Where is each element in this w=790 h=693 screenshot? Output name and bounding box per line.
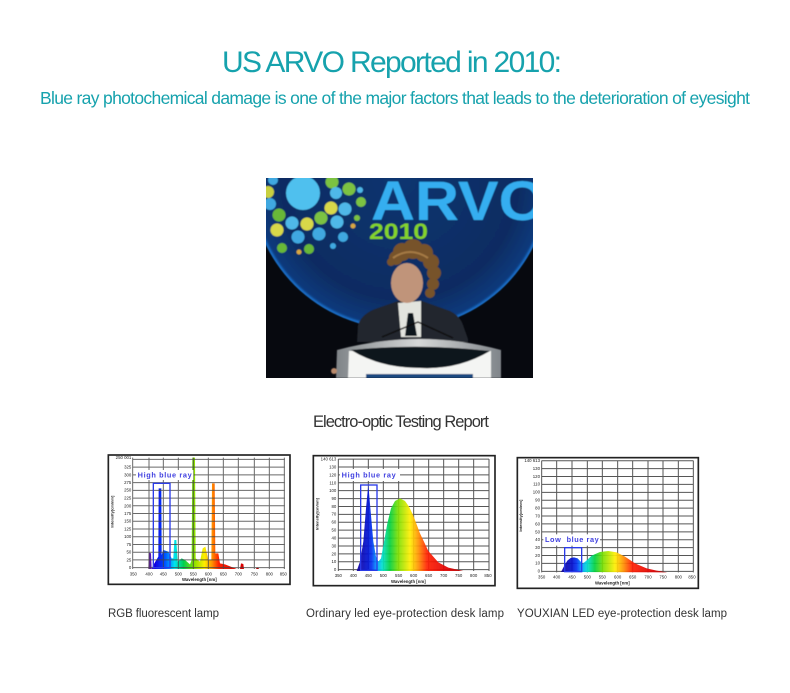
y axis labels: 120 — [329, 472, 337, 477]
podium — [331, 339, 501, 378]
y axis labels: 0 — [538, 569, 541, 574]
y axis labels: 40 — [535, 537, 541, 542]
chart: RGB fluorescent lamp spectrum — [108, 455, 290, 584]
callout: high blue ray — [340, 469, 400, 481]
x axis labels: 750 — [659, 575, 667, 580]
x axis labels — [130, 572, 288, 582]
y axis labels: 0 — [334, 567, 337, 572]
y axis labels: 225 — [124, 495, 132, 500]
y axis labels: 140 613 — [321, 456, 337, 461]
x axis labels: 450 — [365, 573, 373, 578]
x axis labels: Wavelength [nm] — [391, 579, 426, 584]
section heading: Electro-optic Testing Report — [313, 413, 489, 431]
y axis labels — [116, 455, 132, 570]
caption: RGB fluorescent lamp: RGB fluorescent lamp — [108, 608, 219, 620]
y axis labels: 100 — [329, 488, 337, 493]
y axis labels: 70 — [332, 512, 337, 517]
y axis labels: 130 — [329, 464, 337, 469]
x axis labels: 400 — [145, 572, 153, 577]
x axis labels — [335, 573, 492, 584]
x axis labels: 800 — [266, 572, 274, 577]
x axis labels: 500 — [380, 573, 388, 578]
spectrum area — [357, 484, 463, 571]
y axis title: Intensity[cm/nm] — [110, 495, 115, 528]
x axis labels: 350 — [538, 575, 546, 580]
x axis labels: 600 — [410, 573, 418, 578]
y axis labels: 110 — [533, 482, 541, 487]
y axis labels: 0 — [129, 565, 132, 570]
y axis labels: 140 613 — [524, 458, 541, 463]
x axis labels: 550 — [395, 573, 403, 578]
caption: ordinary LED lamp: Ordinary led eye-protection desk lamp — [306, 608, 504, 620]
speaker — [357, 239, 468, 342]
chart frame — [108, 455, 290, 584]
chart: YOUXIAN LED spectrum — [517, 458, 698, 588]
callout: high blue ray: High blue ray — [138, 471, 193, 480]
y axis labels: 20 — [332, 551, 337, 556]
y axis labels: 20 — [535, 553, 541, 558]
chart frame — [313, 456, 495, 586]
y axis labels: 110 — [329, 480, 337, 485]
projected blue disk — [266, 178, 533, 324]
x axis labels: 700 — [644, 575, 652, 580]
ARVO wordmark: ARVO — [371, 169, 546, 232]
y axis labels: 60 — [332, 520, 337, 525]
x axis labels: 550 — [599, 575, 607, 580]
y axis labels: 275 — [124, 480, 132, 485]
y axis labels: 90 — [535, 498, 541, 503]
y axis labels: 120 — [533, 474, 541, 479]
logo dots — [262, 175, 366, 254]
y axis labels: 150 — [124, 519, 132, 524]
callout: low blue ray: Low blue ray — [545, 535, 600, 544]
x axis labels: 500 — [175, 572, 183, 577]
x axis labels: 700 — [235, 572, 243, 577]
x axis labels: 350 — [130, 572, 138, 577]
y axis labels: 40 — [332, 535, 337, 540]
caption: YOUXIAN LED lamp: YOUXIAN LED eye-protection desk lamp — [517, 608, 727, 620]
x axis labels: 850 — [688, 575, 696, 580]
y axis labels: 25 — [127, 557, 132, 562]
x axis labels: 750 — [251, 572, 259, 577]
y axis labels: 50 — [332, 528, 337, 533]
y axis labels — [524, 458, 541, 574]
title: US ARVO Reported in 2010: — [222, 46, 562, 79]
x axis labels: 850 — [280, 572, 288, 577]
y axis labels: 250 — [124, 488, 132, 493]
x axis labels — [538, 575, 696, 586]
y axis labels: 70 — [535, 513, 541, 518]
chart: ordinary LED spectrum — [313, 456, 495, 586]
y axis labels: 75 — [127, 542, 132, 547]
subtitle: Blue ray photochemical damage is one of the major factors that leads to the deterioration of eyesight — [40, 88, 750, 108]
y axis labels: 325 — [124, 465, 132, 470]
y axis title: Intensity[cm/nm] — [315, 497, 320, 530]
x axis labels: 450 — [160, 572, 168, 577]
y axis title: Intensity[cm/nm] — [518, 499, 523, 532]
callout: high blue ray: High blue ray — [342, 471, 397, 480]
y axis labels: 50 — [535, 529, 541, 534]
x axis labels: 400 — [553, 575, 561, 580]
y axis labels: 200 — [124, 503, 132, 508]
y axis labels: 175 — [124, 511, 132, 516]
x axis labels: 500 — [584, 575, 592, 580]
x axis labels: 650 — [425, 573, 433, 578]
x axis labels: Wavelength [nm] — [182, 577, 217, 582]
x axis labels: Wavelength [nm] — [595, 581, 630, 586]
x axis labels: 750 — [455, 573, 463, 578]
x axis labels: 800 — [470, 573, 478, 578]
blue ray highlight box — [153, 483, 170, 568]
y axis labels: 80 — [535, 505, 541, 510]
y axis labels: 100 — [124, 534, 132, 539]
x axis labels: 800 — [675, 575, 683, 580]
y axis labels: 30 — [535, 545, 541, 550]
x axis labels: 350 — [335, 573, 343, 578]
chart frame — [517, 458, 698, 588]
y axis labels: 100 — [533, 490, 541, 495]
y axis labels: 300 — [124, 472, 132, 477]
x axis labels: 400 — [350, 573, 358, 578]
y axis labels: 250 001 — [116, 455, 132, 460]
2010 wordmark: 2010 — [369, 219, 428, 244]
y axis labels: 90 — [332, 496, 337, 501]
y axis labels: 10 — [332, 559, 337, 564]
y axis labels: 50 — [127, 550, 132, 555]
spectrum area — [561, 551, 667, 572]
blue ray highlight box — [565, 548, 582, 572]
x axis labels: 600 — [614, 575, 622, 580]
blue ray highlight box — [361, 485, 377, 570]
y axis labels — [321, 456, 337, 572]
y axis labels: 125 — [124, 526, 132, 531]
y axis labels: 30 — [332, 543, 337, 548]
x axis labels: 850 — [484, 573, 492, 578]
y axis labels: 80 — [332, 504, 337, 509]
photo: ARVO 2010 speaker at podium — [266, 178, 533, 378]
x axis labels: 550 — [190, 572, 198, 577]
y axis labels: 60 — [535, 521, 541, 526]
x axis labels: 600 — [205, 572, 213, 577]
x axis labels: 700 — [440, 573, 448, 578]
y axis labels: 130 — [533, 466, 541, 471]
x axis labels: 650 — [220, 572, 228, 577]
x axis labels: 450 — [568, 575, 576, 580]
x axis labels: 650 — [629, 575, 637, 580]
spectrum area — [148, 458, 259, 569]
y axis labels: 10 — [535, 561, 541, 566]
